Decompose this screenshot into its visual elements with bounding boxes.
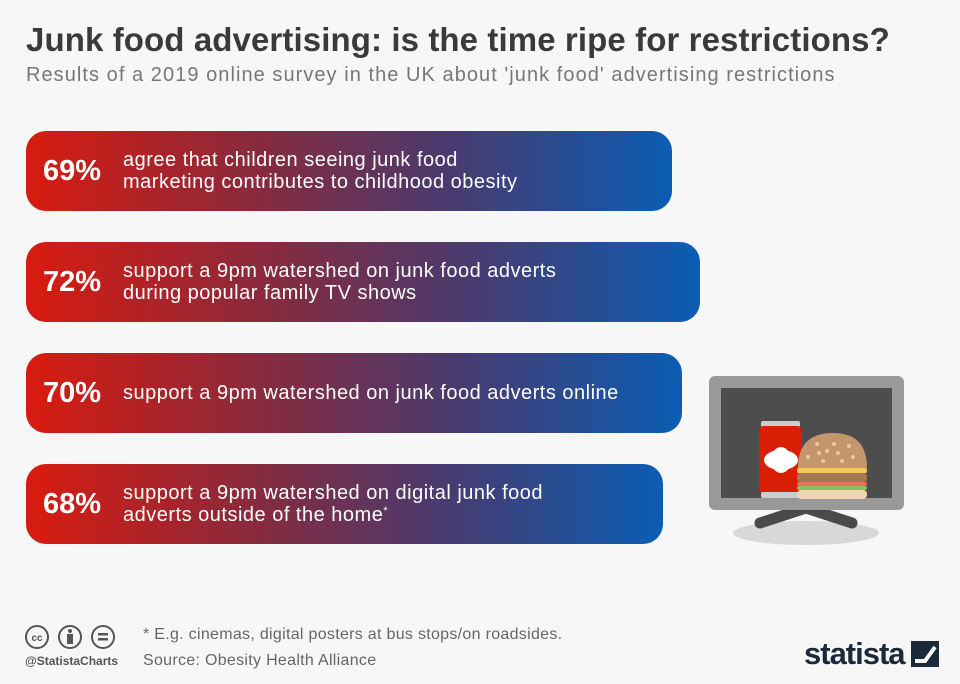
bar: 72%: during popular family TV shows xyxy=(123,282,417,304)
handle: @StatistaCharts xyxy=(25,654,118,668)
icon: license: cc xyxy=(31,633,43,644)
bar: 69%: 69% xyxy=(43,155,101,187)
icon: TV with junk food xyxy=(709,376,904,545)
subtitle: Results of a 2019 online survey in the UK about 'junk food' advertising restrictions xyxy=(26,64,836,86)
bar: 72%: 72% xyxy=(43,266,101,298)
bar: 72% xyxy=(26,242,700,322)
bar: 70%: 70% xyxy=(43,377,101,409)
bar: 68%: support a 9pm watershed on digital junk food xyxy=(123,482,543,504)
title: Junk food advertising: is the time ripe for restrictions? xyxy=(26,21,890,58)
bar: 70% xyxy=(26,353,682,433)
source: Source: Obesity Health Alliance xyxy=(143,652,376,669)
bar: 69%: agree that children seeing junk food xyxy=(123,149,458,171)
bar: 72%: support a 9pm watershed on junk food adverts xyxy=(123,260,556,282)
bar: 70%: support a 9pm watershed on junk food adverts online xyxy=(123,382,619,404)
bar: 68%: adverts outside of the home* xyxy=(123,504,388,526)
bar: 69%: marketing contributes to childhood obesity xyxy=(123,171,518,193)
bar: 68% xyxy=(26,464,663,544)
logo: statista: statista xyxy=(804,636,905,671)
icon: license xyxy=(25,625,115,649)
bar: 68%: 68% xyxy=(43,488,101,520)
bar: 69% xyxy=(26,131,672,211)
footnote: * E.g. cinemas, digital posters at bus stops/on roadsides. xyxy=(143,626,562,643)
